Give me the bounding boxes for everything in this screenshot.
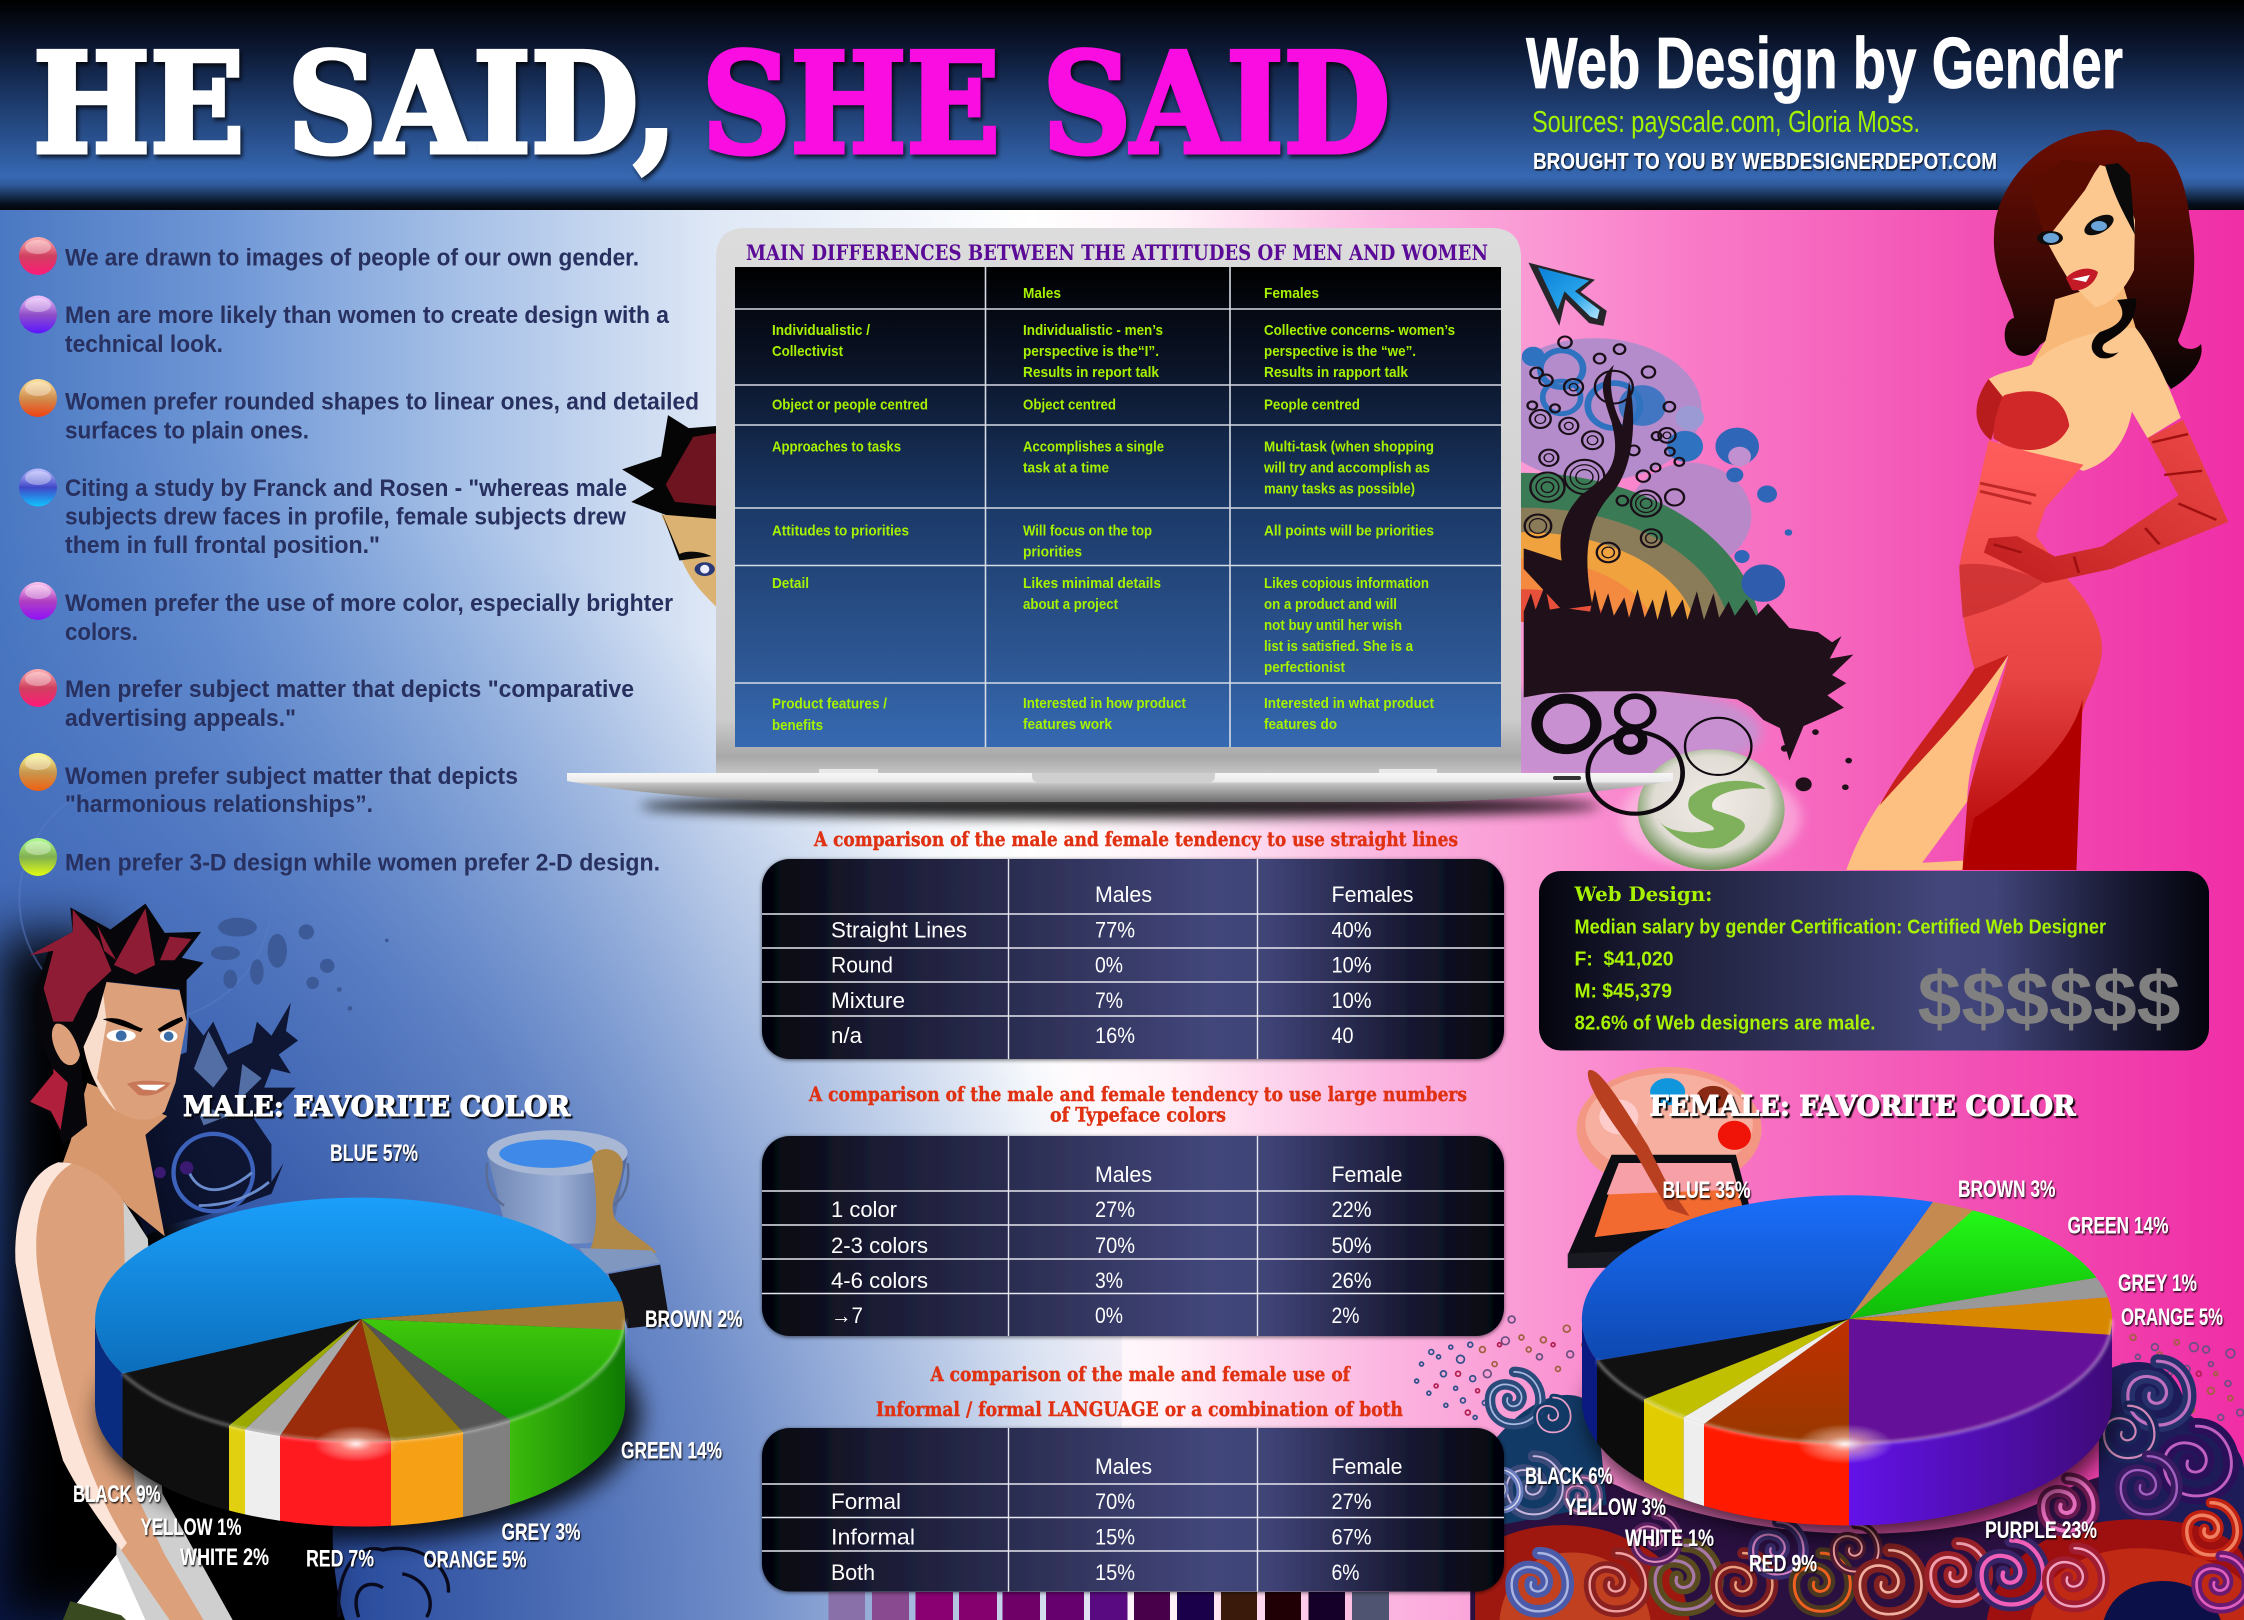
laptop base [567,769,1673,802]
color swatch strip [828,1592,1389,1620]
pie labels [1525,1176,2223,1578]
row: approaches: Approaches to tasks [772,438,901,456]
table: 7% [1095,988,1123,1013]
illustration: swirl garden bottom right [1415,1316,2244,1620]
heading: of Typeface colors [1050,1102,1226,1126]
pie chart [95,1198,625,1527]
key findings list [19,237,699,876]
row: detail: on a product and will [1264,596,1397,613]
header band [0,0,2244,210]
row: approaches: many tasks as possible) [1264,480,1415,498]
row: approaches: Multi-task (when shopping [1264,438,1434,456]
illustration: paint can and brush [487,1130,670,1328]
row: individualistic: Collectivist [772,343,843,360]
row: product features: Interested in what product [1264,695,1434,712]
title: he said: HE SAID, [33,22,677,185]
screen table [735,267,1501,747]
table: 6% [1332,1560,1360,1585]
row: individualistic: Individualistic / [772,322,871,339]
table: Males [1095,1454,1152,1479]
panel heading: Web Design: [1574,882,1712,906]
pie labels: BLUE 57% [330,1140,418,1167]
row: individualistic: perspective is the“I”. [1023,343,1159,360]
row: product features: features work [1023,716,1113,733]
table: Informal [831,1524,915,1550]
table: 3% [1095,1268,1123,1293]
row: detail [772,575,1429,676]
salary lines: F: $41,020 [1574,948,1674,970]
table: Female [1332,1162,1402,1187]
row: approaches: task at a time [1023,460,1109,476]
row: object or people: Object centred [1023,396,1116,414]
pie labels: YELLOW 3% [1565,1494,1666,1521]
row: detail: about a project [1023,596,1118,613]
table: Both [831,1560,875,1585]
finding 7: Women prefer subject matter that depicts [65,763,518,790]
row: priorities: All points will be priorities [1264,522,1434,540]
illustration: woman in red dress [1846,130,2228,870]
face [2030,160,2136,358]
table: 10% [1332,988,1372,1013]
pie labels: WHITE 2% [180,1544,269,1571]
illustration: rings over laptop base [1537,696,1751,814]
finding 8 [19,838,660,876]
arm and neck [15,1162,204,1620]
row: priorities: priorities [1023,544,1082,560]
row: detail: Detail [772,575,809,592]
laptop lid [716,228,1521,773]
finding 8: Men prefer 3-D design while women prefer 2-D design. [65,850,660,876]
table: 40 [1332,1023,1354,1048]
table heading: MAIN DIFFERENCES BETWEEN THE ATTITUDES OF MEN AND WOMEN [746,240,1488,265]
pie side walls [1582,1320,2112,1526]
heading: A comparison of the male and female tendency to use straight lines [813,827,1458,851]
pie labels: PURPLE 23% [1985,1517,2097,1544]
face [82,981,187,1120]
row: product features: Interested in how product [1023,695,1186,712]
table: Round [831,952,893,978]
row: detail: not buy until her wish [1264,617,1402,634]
credit: BROUGHT TO YOU BY WEBDESIGNERDEPOT.COM [1533,148,1997,174]
table: 27% [1332,1489,1372,1514]
table: 0% [1095,1303,1123,1328]
finding 2: technical look. [65,331,223,358]
table: 22% [1332,1197,1372,1222]
table [762,1428,1504,1592]
laptop shadow [640,794,1600,818]
finding 3 [19,379,699,444]
pie side walls [95,1320,625,1527]
illustration: tree with rainbow [1287,337,1853,804]
table: 77% [1095,918,1135,942]
illustration: money sphere [1621,749,1801,870]
eyes and mouth [103,1017,183,1032]
row: detail: Likes copious information [1264,575,1429,592]
table: Female [1332,1454,1402,1479]
pie labels: ORANGE 5% [424,1546,526,1574]
pie labels: GREY 1% [2118,1270,2197,1297]
dollar signs: $$$$$$ [1918,957,2180,1042]
table: 27% [1095,1197,1135,1222]
finding 2 [19,296,670,358]
row: approaches [772,438,1434,498]
table: Males [1095,882,1152,907]
table: 2% [1332,1303,1360,1328]
row: approaches: will try and accomplish as [1263,460,1430,476]
title: she said: SHE SAID [702,22,1390,185]
statistics table: typeface colors [762,1082,1504,1336]
salary lines [1574,916,2106,1034]
table [762,859,1504,1059]
table: Females [1332,882,1414,907]
table: 67% [1332,1524,1372,1550]
table: 50% [1332,1233,1372,1258]
heading: A comparison of the male and female use of [930,1362,1351,1386]
laptop with comparison table [567,228,1673,818]
pie labels: GREY 3% [502,1519,580,1546]
table: 70% [1095,1233,1135,1258]
table: 15% [1095,1560,1135,1585]
finding 4: them in full frontal position." [65,532,380,559]
header row: Males [1023,285,1061,302]
row: individualistic: Collective concerns- women’s [1264,322,1455,339]
table: Formal [831,1489,901,1514]
pie labels: BROWN 2% [645,1306,742,1333]
table: 2-3 colors [831,1233,928,1258]
row: individualistic: Individualistic - men’s [1023,322,1163,339]
shirt [63,1201,233,1620]
pie labels: GREEN 14% [2068,1212,2168,1240]
row: object or people: Object or people centred [772,396,928,414]
header row: Females [1264,285,1319,302]
table: 70% [1095,1489,1135,1514]
pie labels: GREEN 14% [621,1438,722,1464]
pie labels: RED 7% [306,1546,374,1572]
row: product features: benefits [772,717,823,734]
finding 5: colors. [65,619,138,646]
chart title: MALE: FAVORITE COLOR [183,1090,571,1123]
finding 4: subjects drew faces in profile, female subjects drew [65,504,626,530]
ear [52,1024,80,1065]
row: object or people: People centred [1264,396,1360,414]
base fields [1470,1466,2244,1620]
row: object or people [772,396,1360,414]
pie shadow [100,1290,640,1540]
row: priorities: Attitudes to priorities [772,522,909,540]
row: detail: list is satisfied. She is a [1264,638,1414,655]
finding 3: Women prefer rounded shapes to linear ones, and detailed [65,388,699,416]
finding 4 [19,468,627,559]
pie labels: YELLOW 1% [140,1514,242,1541]
finding 2: Men are more likely than women to create design with a [65,302,670,329]
table: n/a [831,1023,863,1048]
decorative splatter behind male figure [19,776,448,1617]
pie top slices [95,1198,625,1442]
scattered rings [1415,1316,2244,1430]
pie labels: BROWN 3% [1958,1176,2056,1203]
body [1846,279,2228,870]
pie labels [73,1140,742,1574]
row: detail: Likes minimal details [1023,575,1161,592]
finding 3: surfaces to plain ones. [65,418,309,444]
statistics table: language [762,1362,1504,1592]
illustration: cursor arrow [1528,263,1607,326]
red rainbow arcs [1475,1525,1690,1620]
table: →7 [831,1303,863,1328]
table: 1 color [831,1197,897,1222]
table: Straight Lines [831,918,967,942]
row: individualistic: perspective is the “we”. [1264,343,1416,360]
pie labels: BLACK 9% [73,1481,160,1508]
pie labels: BLUE 35% [1662,1177,1750,1204]
chart title: FEMALE: FAVORITE COLOR [1650,1090,2076,1122]
row: individualistic: Results in rapport talk [1264,364,1409,381]
finding 7: "harmonious relationships”. [65,791,373,818]
pie labels: RED 9% [1749,1550,1817,1578]
header row [1023,285,1319,302]
table: 0% [1095,952,1123,978]
row: individualistic: Results in report talk [1023,364,1160,381]
curls [1481,1361,2244,1614]
illustration: peeking man head [622,415,720,610]
male favorite color chart [73,1090,742,1574]
table: 16% [1095,1023,1135,1048]
row: product features: features do [1264,716,1337,733]
table: 15% [1095,1524,1135,1550]
table: Males [1095,1162,1152,1187]
hair [29,904,204,1144]
row: product features [772,695,1434,734]
row: product features: Product features / [772,696,888,712]
finding 1 [19,237,639,275]
pie shadow [1588,1293,2112,1537]
heading [876,1362,1403,1421]
table: Mixture [831,988,905,1013]
salary lines: 82.6% of Web designers are male. [1574,1012,1876,1034]
illustration: male figure [15,904,233,1620]
finding 6: Men prefer subject matter that depicts "comparative [65,676,634,703]
finding 7 [19,753,518,818]
panel: web design salary [1539,871,2209,1050]
salary lines: Median salary by gender Certification: Certified Web Designer [1574,916,2106,938]
row: individualistic [772,322,1455,381]
pie top slices [1582,1195,2112,1444]
illustration: palette and tablet [1568,1067,1762,1268]
heading: A comparison of the male and female tendency to use large numbers [808,1082,1467,1106]
pie chart [1582,1195,2112,1526]
row: detail: perfectionist [1264,659,1345,676]
heading [808,1082,1467,1126]
finding 6 [19,669,634,732]
row: priorities [772,522,1434,560]
hair back [1994,130,2202,389]
heading: Informal / formal LANGUAGE or a combination of both [876,1397,1403,1421]
table: 40% [1332,918,1372,942]
finding 1: We are drawn to images of people of our own gender. [65,244,639,272]
female favorite color chart [1525,1090,2223,1578]
salary lines: M: $45,379 [1574,980,1672,1002]
table: 26% [1332,1268,1372,1293]
statistics table: straight lines [762,827,1504,1059]
pie labels: BLACK 6% [1525,1463,1612,1490]
finding 5 [19,582,673,646]
row: approaches: Accomplishes a single [1023,438,1164,456]
sources: Sources: payscale.com, Gloria Moss. [1532,104,1920,139]
finding 6: advertising appeals." [65,705,296,732]
pie labels: WHITE 1% [1625,1525,1714,1552]
table: 10% [1332,952,1372,978]
finding 4: Citing a study by Franck and Rosen - "whereas male [65,475,627,502]
finding 5: Women prefer the use of more color, especially brighter [65,590,673,617]
table: 4-6 colors [831,1268,928,1293]
table [762,1136,1504,1336]
row: priorities: Will focus on the top [1023,522,1152,540]
